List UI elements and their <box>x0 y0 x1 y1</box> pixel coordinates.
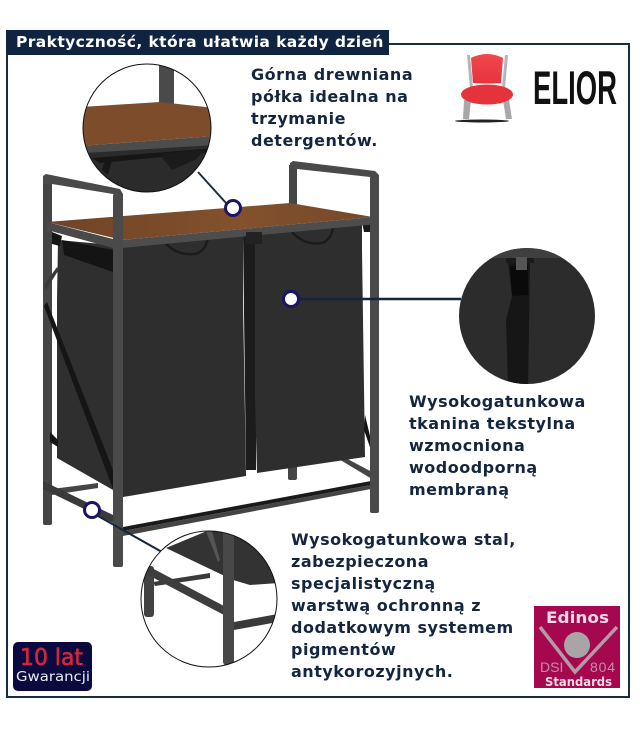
badge: Edinos standards: DSI <box>540 659 563 675</box>
caption: top shelf: trzymanie <box>251 109 346 128</box>
badge: 10 year warranty: 10 lat <box>20 645 83 671</box>
laundry hamper illustration <box>43 161 379 567</box>
diagonal braces <box>44 232 371 489</box>
handles and front posts <box>43 161 379 567</box>
wooden top shelf <box>47 203 378 248</box>
icon: red chair <box>455 54 513 122</box>
inset circle: frame detail <box>140 530 280 670</box>
caption: steel frame: dodatkowym systemem <box>291 618 514 637</box>
logo: Elior <box>455 54 617 122</box>
badge: Edinos standards: Edinos <box>546 608 609 627</box>
callout: fabric <box>284 245 600 499</box>
caption: fabric: wodoodporną <box>409 458 538 477</box>
heading banner <box>6 30 389 55</box>
caption: steel frame: zabezpieczona <box>291 552 429 571</box>
right fabric bag <box>243 220 372 473</box>
badge: 10 year warranty <box>13 642 92 691</box>
callout: steel frame <box>84 502 516 681</box>
connector line <box>298 298 461 300</box>
heading banner: Praktyczność, która ułatwia każdy dzień <box>16 33 384 51</box>
bag handle <box>163 238 208 254</box>
badge: Edinos standards: 804 <box>590 659 615 675</box>
caption: steel frame: Wysokogatunkowa stal, <box>291 530 516 549</box>
caption: fabric: Wysokogatunkowa <box>409 392 586 411</box>
callout: top shelf <box>80 60 413 216</box>
caption: steel frame: warstwą ochronną z <box>291 596 481 615</box>
caption: steel frame: antykorozyjnych. <box>291 662 453 681</box>
connector line <box>198 172 226 203</box>
caption: steel frame: pigmentów <box>291 640 396 659</box>
caption: top shelf: detergentów. <box>251 131 378 150</box>
connector line <box>98 516 162 552</box>
badge: 10 year warranty: Gwarancji <box>16 670 90 685</box>
caption: top shelf: Górna drewniana <box>251 65 413 84</box>
caption: fabric: wzmocniona <box>409 436 525 455</box>
badge: Edinos standards <box>534 606 620 689</box>
caption: fabric: tkanina tekstylna <box>409 414 576 433</box>
marker <box>284 292 298 306</box>
caption: steel frame: specjalistyczną <box>291 574 436 593</box>
marker <box>226 200 240 216</box>
caption: top shelf: półka idealna na <box>251 87 408 106</box>
inset circle: fabric detail <box>459 248 595 384</box>
badge: Edinos standards: Standards <box>545 675 612 689</box>
caption: fabric: membraną <box>409 480 510 499</box>
left fabric bag <box>57 234 246 497</box>
marker <box>84 502 100 518</box>
inset circle: shelf detail <box>82 64 212 192</box>
back frame posts and lower bars <box>43 165 372 536</box>
